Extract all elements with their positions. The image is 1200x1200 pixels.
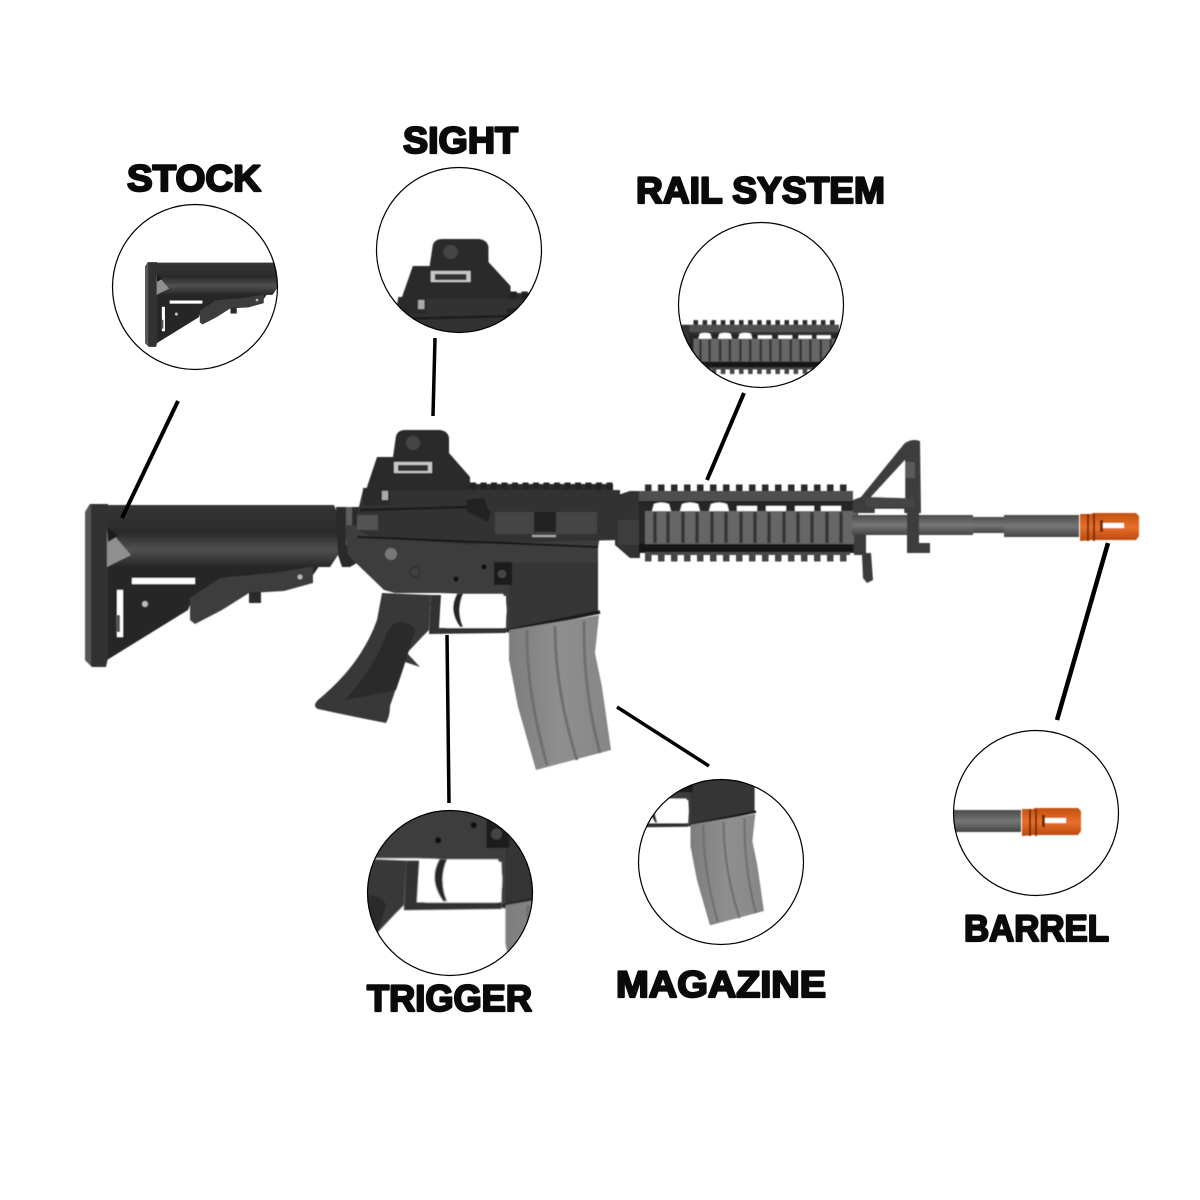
inset: magazine — [638, 778, 804, 946]
heading: stock: STOCK — [127, 158, 261, 199]
leader line: trigger — [447, 635, 449, 803]
heading: rail system: RAIL SYSTEM — [636, 170, 885, 211]
heading: trigger: TRIGGER — [367, 978, 532, 1019]
inset: barrel — [952, 730, 1120, 896]
leader line: sight — [433, 338, 435, 416]
inset: sight — [376, 166, 542, 334]
leader line: stock — [122, 401, 178, 518]
leader line: barrel — [1057, 543, 1108, 720]
inset: stock — [112, 204, 278, 370]
heading: sight: SIGHT — [403, 120, 518, 161]
inset: trigger — [366, 810, 534, 976]
heading: barrel: BARREL — [964, 908, 1109, 949]
leader line: magazine — [617, 707, 709, 766]
inset: rail system — [678, 222, 844, 388]
heading: magazine: MAGAZINE — [616, 964, 826, 1005]
main rifle illustration — [85, 430, 1139, 770]
leader line: rail system — [707, 393, 744, 480]
